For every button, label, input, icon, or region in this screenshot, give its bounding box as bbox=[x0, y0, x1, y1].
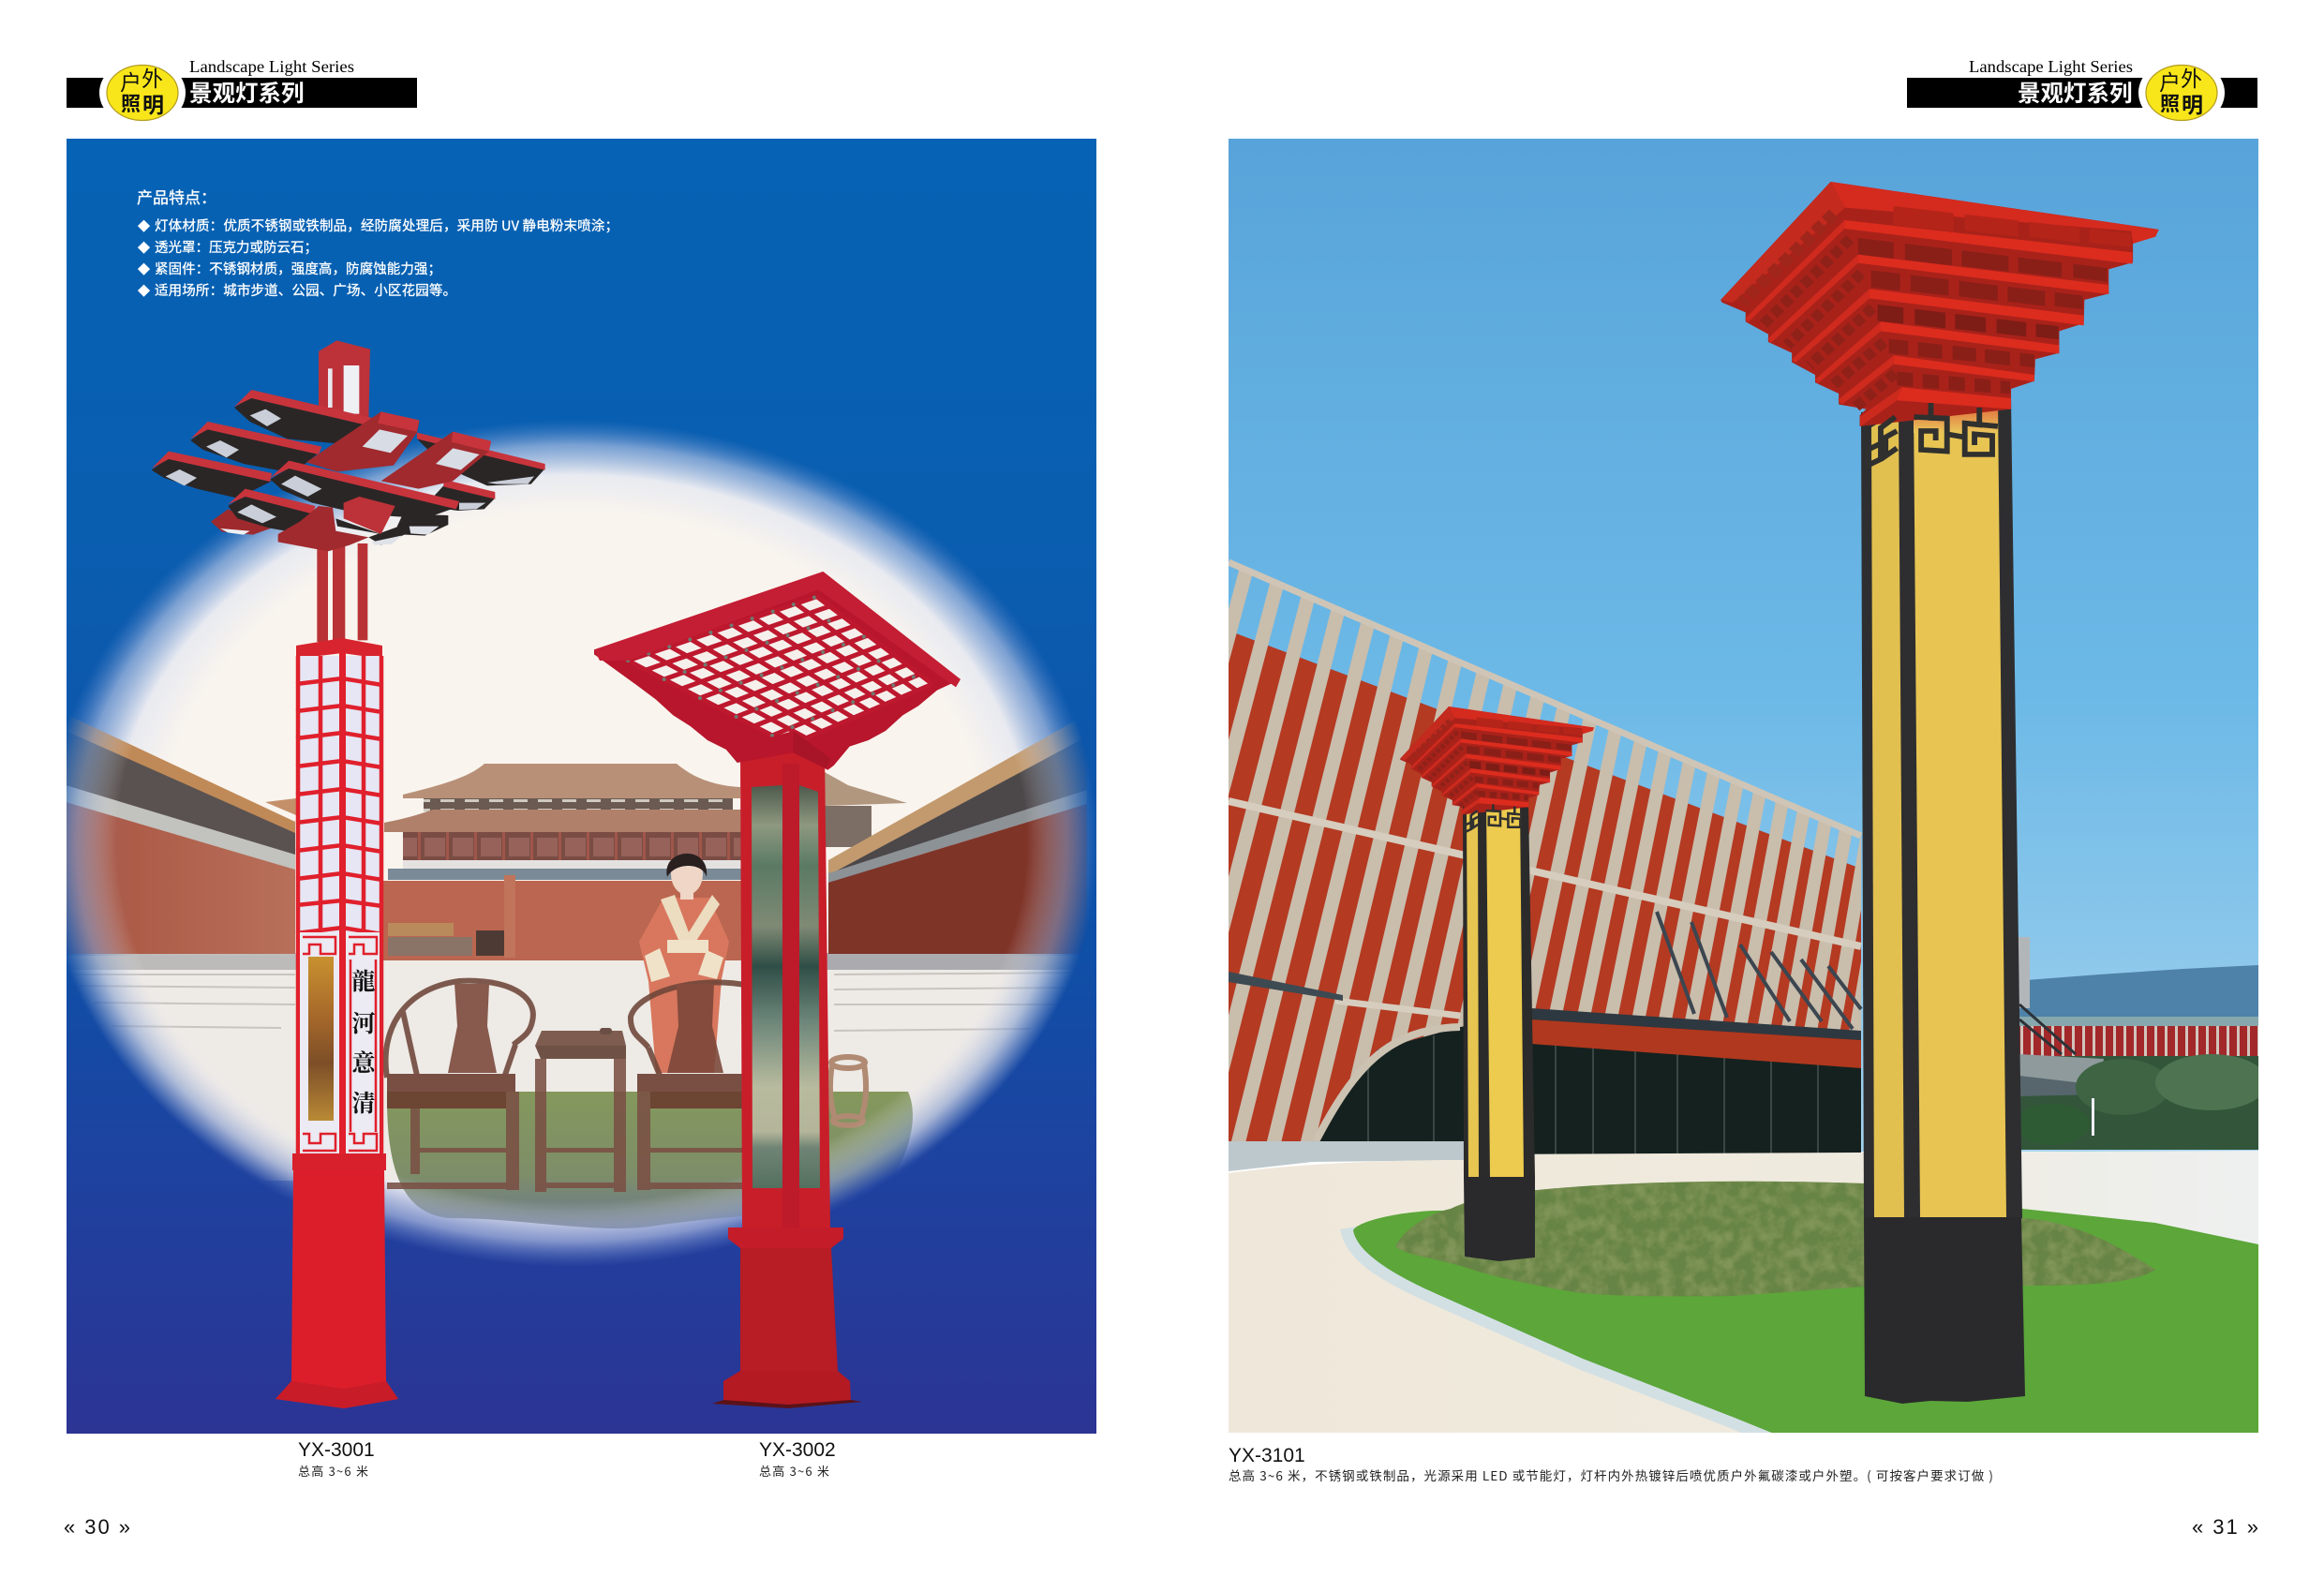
product features text: ◆ bbox=[138, 216, 150, 234]
product features text: 适用场所：城市步道、公园、广场、小区花园等。 bbox=[155, 280, 456, 300]
table and chairs bbox=[386, 981, 750, 1192]
pedestal bbox=[728, 1227, 843, 1248]
lamp YX-3001 bbox=[152, 340, 545, 1408]
left page header bbox=[67, 57, 417, 127]
pedestal bbox=[292, 1153, 386, 1170]
building beams bbox=[1229, 562, 1861, 1141]
woman in red dress bbox=[639, 854, 729, 1073]
page number 30: « 30 » bbox=[64, 1515, 130, 1539]
product features text: 紧固件：不锈钢材质，强度高，防腐蚀能力强； bbox=[155, 259, 441, 278]
left page header: 明 bbox=[142, 87, 164, 119]
glass panels bbox=[752, 785, 782, 1188]
lower panels bbox=[300, 932, 380, 1153]
product features text: 透光罩：压克力或防云石； bbox=[155, 237, 318, 257]
large lamp roof bbox=[1721, 182, 2159, 466]
small lamp bbox=[1400, 707, 1594, 1261]
plaza ground bbox=[1229, 1151, 2258, 1433]
lawn and curb bbox=[1351, 1209, 2258, 1436]
left page header: 照 bbox=[121, 89, 141, 117]
central palace gate bbox=[382, 764, 907, 960]
square lattice lamp head bbox=[594, 572, 961, 770]
product features text: ◆ bbox=[138, 260, 150, 277]
left palace wall bbox=[66, 714, 296, 954]
lamp body bbox=[740, 750, 830, 1227]
label: YX-3001: 总高 3~6 米 bbox=[298, 1462, 368, 1480]
label: YX-3002: 总高 3~6 米 bbox=[759, 1462, 829, 1480]
panel: right product photo bbox=[1229, 139, 2258, 1433]
grass rug bbox=[387, 1092, 913, 1228]
left page header: 景观灯系列 bbox=[189, 76, 304, 109]
label: YX-3001 bbox=[298, 1439, 375, 1480]
right page header: 外 bbox=[2181, 61, 2202, 93]
lantern grid bbox=[296, 651, 382, 1154]
left page header: 户 bbox=[120, 65, 142, 97]
label: YX-3002: YX-3002 bbox=[759, 1439, 836, 1461]
shrubs bbox=[1395, 1182, 2155, 1296]
description text: 总高 3~6 米，不锈钢或铁制品，光源采用 LED 或节能灯，灯杆内外热镀锌后喷优质户外氟碳漆或户外塑。( 可按客户要求订做 ) bbox=[1229, 1465, 1993, 1484]
product features text: 产品特点： bbox=[137, 185, 216, 208]
product features text: ◆ bbox=[138, 281, 150, 299]
product features text: 灯体材质：优质不锈钢或铁制品，经防腐处理后，采用防 UV 静电粉末喷涂； bbox=[155, 216, 618, 235]
product features text bbox=[137, 185, 618, 300]
glass facade bbox=[1316, 1015, 1861, 1154]
small lamp roof bbox=[1400, 707, 1594, 832]
panel: left product photo bbox=[45, 139, 1098, 1434]
lower panels: 意 bbox=[351, 1049, 377, 1077]
right page header: 明 bbox=[2182, 87, 2203, 119]
right page header: Landscape Light Series bbox=[1969, 57, 2133, 76]
right page header bbox=[1907, 57, 2257, 127]
page number 31: « 31 » bbox=[2192, 1515, 2258, 1539]
lower panels: 清 bbox=[351, 1091, 376, 1117]
right page header: 景观灯系列 bbox=[2018, 76, 2133, 109]
low wall bbox=[1229, 1141, 1467, 1171]
right palace wall bbox=[828, 714, 1087, 954]
right page header: 照 bbox=[2160, 89, 2180, 117]
lower panels: 龍 bbox=[351, 969, 376, 995]
label: YX-3002 bbox=[759, 1439, 836, 1480]
left page header: Landscape Light Series bbox=[189, 57, 354, 76]
lamp head: crossed beams bbox=[152, 340, 545, 642]
palace scene bbox=[66, 714, 1096, 1228]
label: YX-3101: YX-3101 bbox=[1229, 1445, 1305, 1466]
product features text: ◆ bbox=[138, 238, 150, 256]
large lamp bbox=[1721, 182, 2159, 1404]
distant mountain and scenery bbox=[2015, 937, 2268, 1150]
cap bbox=[296, 638, 382, 656]
label: YX-3001: YX-3001 bbox=[298, 1439, 375, 1461]
right page header: 户 bbox=[2159, 65, 2181, 97]
lower panels: 河 bbox=[351, 1011, 376, 1037]
left page header: 外 bbox=[142, 61, 163, 93]
building slatted facade bbox=[1229, 570, 1861, 1141]
stool bbox=[830, 1057, 866, 1125]
lamp YX-3002 bbox=[594, 572, 961, 1408]
